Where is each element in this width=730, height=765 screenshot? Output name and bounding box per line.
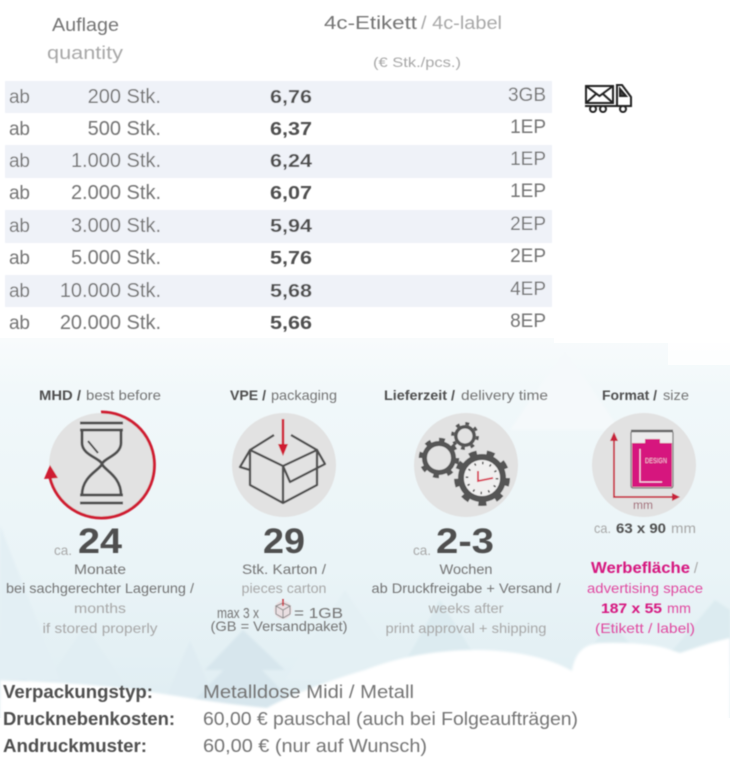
heading: packaging [271, 387, 337, 403]
advertising space: advertising space [587, 580, 703, 596]
row 500: 500 Stk. [88, 118, 161, 140]
panel: best before [6, 387, 194, 636]
icon: box with red arrow [232, 413, 336, 517]
row 3000: 3.000 Stk. [71, 215, 161, 237]
proof sample: 60,00 € (nur auf Wunsch) [203, 735, 427, 756]
description: Stk. Karton / [242, 561, 326, 577]
icon: gears with clock [414, 413, 518, 517]
row 2000: 2.000 Stk. [71, 182, 161, 204]
packaging type: Metalldose Midi / Metall [203, 681, 414, 702]
description: Monate [74, 561, 126, 577]
panel: size [587, 387, 703, 636]
row 3000: 2EP [510, 214, 546, 235]
description: max 3 x [217, 605, 259, 622]
row 1000: 1.000 Stk. [71, 150, 161, 172]
icon: mail truck [585, 85, 631, 112]
price table [5, 81, 552, 334]
row 20000 [9, 311, 546, 334]
proof sample: Andruckmuster: [3, 735, 147, 756]
row 2000: ab [9, 183, 30, 204]
row 1000: 6,24 [270, 151, 312, 171]
row 5000: 5.000 Stk. [71, 247, 161, 269]
heading [39, 387, 161, 403]
heading: label: (€ Stk./pcs.) [373, 54, 461, 70]
heading: best before [86, 387, 161, 403]
row 500: 6,37 [270, 119, 312, 139]
row 20000: 20.000 Stk. [60, 312, 161, 334]
panel: delivery time [372, 387, 561, 636]
row 20000: 5,66 [270, 313, 312, 333]
heading: delivery time [461, 387, 548, 403]
heading: MHD / [39, 387, 81, 403]
icon: mini box [274, 599, 292, 619]
value 24: 24 [78, 522, 123, 561]
snow hills [0, 638, 730, 765]
description: ab Druckfreigabe + Versand / [372, 580, 561, 596]
proof sample [3, 735, 427, 756]
print costs: 60,00 € pauschal (auch bei Folgeaufträgen) [203, 708, 578, 729]
row 3000: ab [9, 216, 30, 237]
row 5000: 5,76 [270, 248, 312, 268]
description: if stored properly [42, 620, 158, 636]
description: print approval + shipping [386, 620, 546, 636]
description: months [74, 600, 126, 616]
value 2-3: 2-3 [436, 522, 494, 561]
icon: tin with dimension arrows: DESIGN [645, 458, 667, 465]
value 2-3: ca. [413, 542, 431, 558]
packaging type [3, 681, 414, 702]
description: bei sachgerechter Lagerung / [6, 580, 194, 596]
description: (GB = Versandpaket) [210, 618, 348, 634]
heading: quantity: quantity [47, 43, 123, 63]
description: = 1GB [294, 605, 343, 622]
heading [230, 387, 337, 403]
row 5000: 2EP [510, 246, 546, 267]
packaging type: Verpackungstyp: [3, 681, 153, 702]
row 200: ab [9, 87, 30, 108]
row 3000: 5,94 [270, 216, 312, 236]
row 2000: 1EP [510, 181, 546, 202]
heading: quantity [47, 15, 123, 63]
heading: label [324, 13, 502, 70]
value 24 [54, 522, 123, 561]
row 200: 200 Stk. [88, 86, 161, 108]
print costs: Drucknebenkosten: [3, 708, 175, 729]
size value: ca. [594, 520, 611, 536]
row 1000: ab [9, 151, 30, 172]
product details [3, 681, 578, 756]
row 500 [9, 117, 546, 140]
print costs [3, 708, 578, 729]
heading [602, 387, 689, 403]
row 10000 [9, 279, 546, 302]
description: Wochen [440, 561, 492, 577]
advertising space [587, 560, 703, 636]
row 10000: 10.000 Stk. [60, 280, 161, 302]
row 200: 3GB [508, 85, 546, 106]
value 29: 29 [263, 522, 305, 561]
description: pieces carton [242, 580, 326, 596]
description: weeks after [427, 600, 504, 616]
row 1000 [9, 149, 546, 172]
advertising space: 187 x 55 [601, 600, 662, 616]
size value [594, 520, 696, 536]
heading [384, 387, 548, 403]
icon: tin with dimension arrows: mm [633, 498, 653, 512]
background: winter scene [0, 338, 730, 718]
row 10000: 4EP [510, 279, 546, 300]
icon: tin with dimension arrows [592, 413, 696, 517]
advertising space: Werbefläche [591, 560, 690, 577]
row 200: 6,76 [270, 87, 312, 107]
icon: hourglass with red arrow [44, 412, 154, 518]
panel: packaging [210, 387, 348, 634]
description [210, 561, 348, 634]
row 500: ab [9, 119, 30, 140]
heading: Lieferzeit / [384, 387, 455, 403]
heading: Format / [602, 387, 657, 403]
description [372, 561, 561, 636]
heading: size [663, 387, 689, 403]
heading: label: 4c-Etikett [324, 13, 417, 33]
description [6, 561, 194, 636]
row 10000: ab [9, 281, 30, 302]
size value: 63 x 90 [616, 520, 666, 536]
heading: quantity: Auflage [52, 15, 119, 35]
row 2000: 6,07 [270, 183, 312, 203]
row 1000: 1EP [510, 149, 546, 170]
size value: mm [671, 520, 696, 536]
row 2000 [9, 181, 546, 204]
table header [47, 13, 502, 70]
row 20000: ab [9, 313, 30, 334]
row 5000 [9, 246, 546, 269]
row 200 [9, 85, 546, 108]
heading: VPE / [230, 387, 266, 403]
heading: label: / 4c-label [421, 13, 502, 33]
row 5000: ab [9, 248, 30, 269]
advertising space: mm [667, 600, 691, 616]
row 3000 [9, 214, 546, 237]
row 20000: 8EP [510, 311, 546, 332]
row 10000: 5,68 [270, 281, 312, 301]
advertising space: (Etikett / label) [595, 620, 695, 636]
value 2-3 [413, 522, 494, 561]
value 24: ca. [54, 542, 72, 558]
advertising space: / [694, 560, 699, 577]
row 500: 1EP [510, 117, 546, 138]
